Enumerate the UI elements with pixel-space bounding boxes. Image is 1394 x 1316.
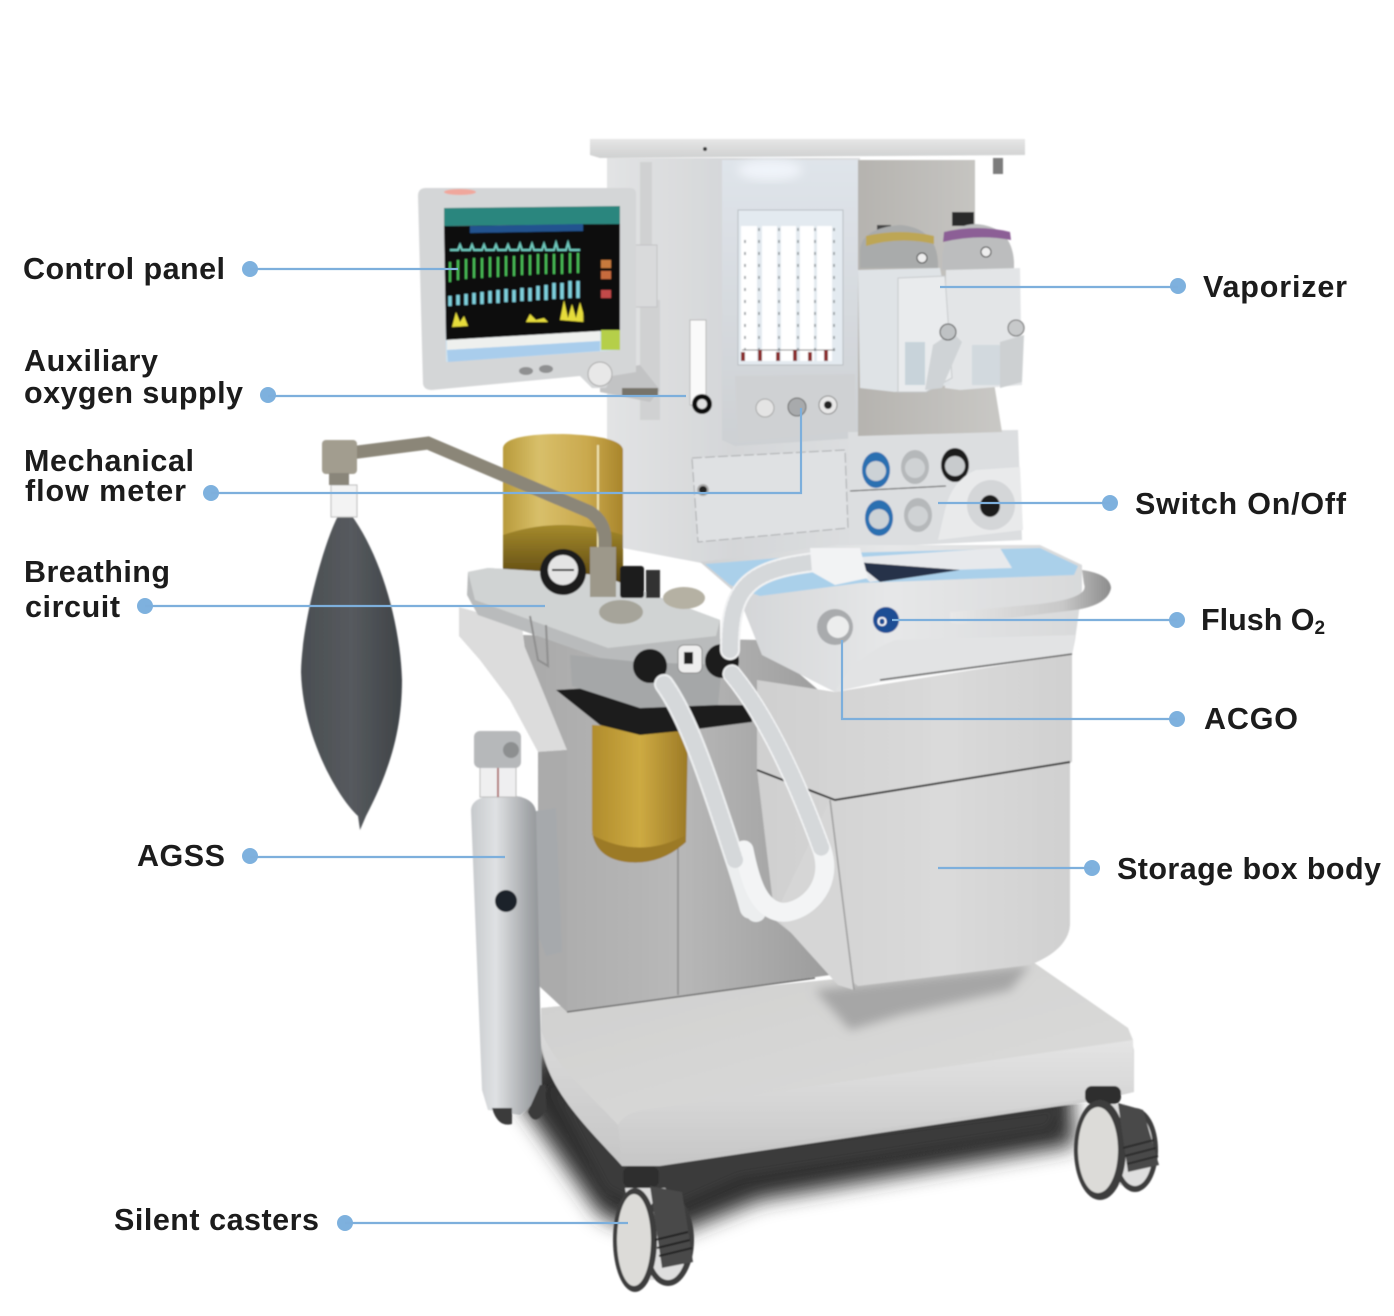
callout: mechanical flow meter: flow meter xyxy=(25,474,186,508)
ACGO knob xyxy=(817,609,853,645)
left vaporizer xyxy=(858,225,962,392)
status light xyxy=(444,189,476,195)
front caster xyxy=(613,1166,694,1292)
aux knob xyxy=(692,394,712,414)
vaporizers xyxy=(858,212,1024,392)
gauge grey bottom xyxy=(904,498,932,532)
monitor buttons xyxy=(519,365,553,375)
alarm tiles xyxy=(601,260,611,298)
top shelf xyxy=(590,139,1025,174)
breathing bag xyxy=(301,485,402,830)
control panel monitor xyxy=(418,188,660,402)
valve panel xyxy=(735,374,856,442)
callout: silent casters: Silent casters xyxy=(114,1203,319,1237)
soft keys xyxy=(447,330,620,362)
waveform 1 xyxy=(450,243,580,250)
callout: auxiliary oxygen supply xyxy=(24,344,686,410)
gauge blue bottom xyxy=(865,500,893,536)
callout: flush O2: 2 xyxy=(1315,618,1325,639)
callout: switch on/off: Switch On/Off xyxy=(1135,487,1347,521)
waveform 3 xyxy=(450,281,578,306)
gauge side panel xyxy=(848,430,1022,548)
cap xyxy=(474,731,521,768)
blue tray xyxy=(705,548,1078,596)
air port xyxy=(698,485,708,495)
waveform 2 xyxy=(450,253,578,282)
AGSS xyxy=(471,731,562,1125)
cylinder xyxy=(471,795,542,1115)
flow tubes glass xyxy=(738,210,843,365)
port hole xyxy=(495,890,517,912)
callout: AGSS xyxy=(137,839,505,873)
corrugated hoses xyxy=(664,562,825,912)
switch dial xyxy=(967,480,1015,530)
work table xyxy=(700,545,1111,692)
callout: mechanical flow meter xyxy=(24,408,801,508)
wire handle xyxy=(530,616,548,666)
callout: breathing circuit xyxy=(24,555,545,624)
papers on tray xyxy=(845,548,1012,582)
lower drawer xyxy=(757,762,1070,986)
machine illustration xyxy=(301,139,1159,1292)
manometer xyxy=(540,549,586,595)
callout: vaporizer xyxy=(940,270,1347,304)
flush button: O xyxy=(877,614,887,629)
callout: flush O2: Flush O xyxy=(1201,603,1315,637)
access door xyxy=(692,450,848,542)
flush button xyxy=(873,607,899,633)
numeric column xyxy=(583,224,620,332)
sight glass xyxy=(480,765,516,797)
vaporizer recess xyxy=(858,160,1002,436)
gauge black top xyxy=(941,448,969,482)
callout: switch on/off xyxy=(938,487,1347,521)
bellows canister xyxy=(503,434,623,590)
hinge block xyxy=(633,245,657,307)
callout: mechanical flow meter: Mechanical xyxy=(24,444,194,478)
rear caster xyxy=(1074,1086,1159,1200)
reservoir arm xyxy=(322,440,605,552)
switch plate xyxy=(938,467,1023,540)
storage box xyxy=(757,654,1072,990)
callout: storage box body: Storage box body xyxy=(1117,852,1381,886)
waveform 4 xyxy=(452,300,584,327)
side latch xyxy=(622,388,658,396)
ports xyxy=(633,644,739,683)
callout: ACGO: ACGO xyxy=(1204,702,1298,736)
callout: ACGO xyxy=(842,640,1298,736)
callout: control panel xyxy=(23,252,458,286)
tower body xyxy=(607,158,860,565)
floor shadow xyxy=(515,1040,1075,1240)
gauge grey top xyxy=(901,450,929,484)
screen xyxy=(444,206,620,362)
callout: flush O2 xyxy=(892,603,1325,639)
arm head xyxy=(322,440,357,474)
monitor knob xyxy=(588,362,612,386)
small wheels xyxy=(492,1085,546,1125)
callout: breathing circuit: circuit xyxy=(25,590,120,624)
bracket xyxy=(530,808,562,956)
callout: auxiliary oxygen supply: oxygen supply xyxy=(24,376,243,410)
soda lime absorber xyxy=(556,655,752,863)
upper drawer xyxy=(757,654,1072,800)
light highlight xyxy=(738,160,802,180)
callout: vaporizer: Vaporizer xyxy=(1203,270,1347,304)
hinge bar xyxy=(640,162,660,420)
tube elbow xyxy=(810,548,868,585)
wheeled base xyxy=(541,960,1134,1166)
upper tower xyxy=(607,158,1022,565)
handle xyxy=(950,570,1111,624)
bag neck xyxy=(331,485,357,517)
valve post xyxy=(590,547,616,597)
callout: control panel: Control panel xyxy=(23,252,225,286)
callout: silent casters xyxy=(114,1203,628,1237)
gauge blue top xyxy=(862,452,890,488)
callout: breathing circuit: Breathing xyxy=(24,555,170,589)
monitor housing xyxy=(418,188,636,390)
bag xyxy=(301,516,402,830)
lower cabinet column xyxy=(459,607,830,1012)
pressure gauges and power switch xyxy=(850,448,1023,540)
side fin xyxy=(775,800,854,990)
breathing circuit tray xyxy=(467,547,720,668)
arm tube xyxy=(350,443,605,552)
aux flow tube xyxy=(690,320,706,405)
monitor arm xyxy=(600,365,660,402)
callout: auxiliary oxygen supply: Auxiliary xyxy=(24,344,158,378)
flowmeter column xyxy=(722,160,858,446)
right vaporizer xyxy=(942,212,1024,390)
callout: AGSS: AGSS xyxy=(137,839,225,873)
drawer curve xyxy=(835,635,1075,692)
callout: storage box body xyxy=(938,852,1381,886)
valve knobs xyxy=(599,566,705,624)
